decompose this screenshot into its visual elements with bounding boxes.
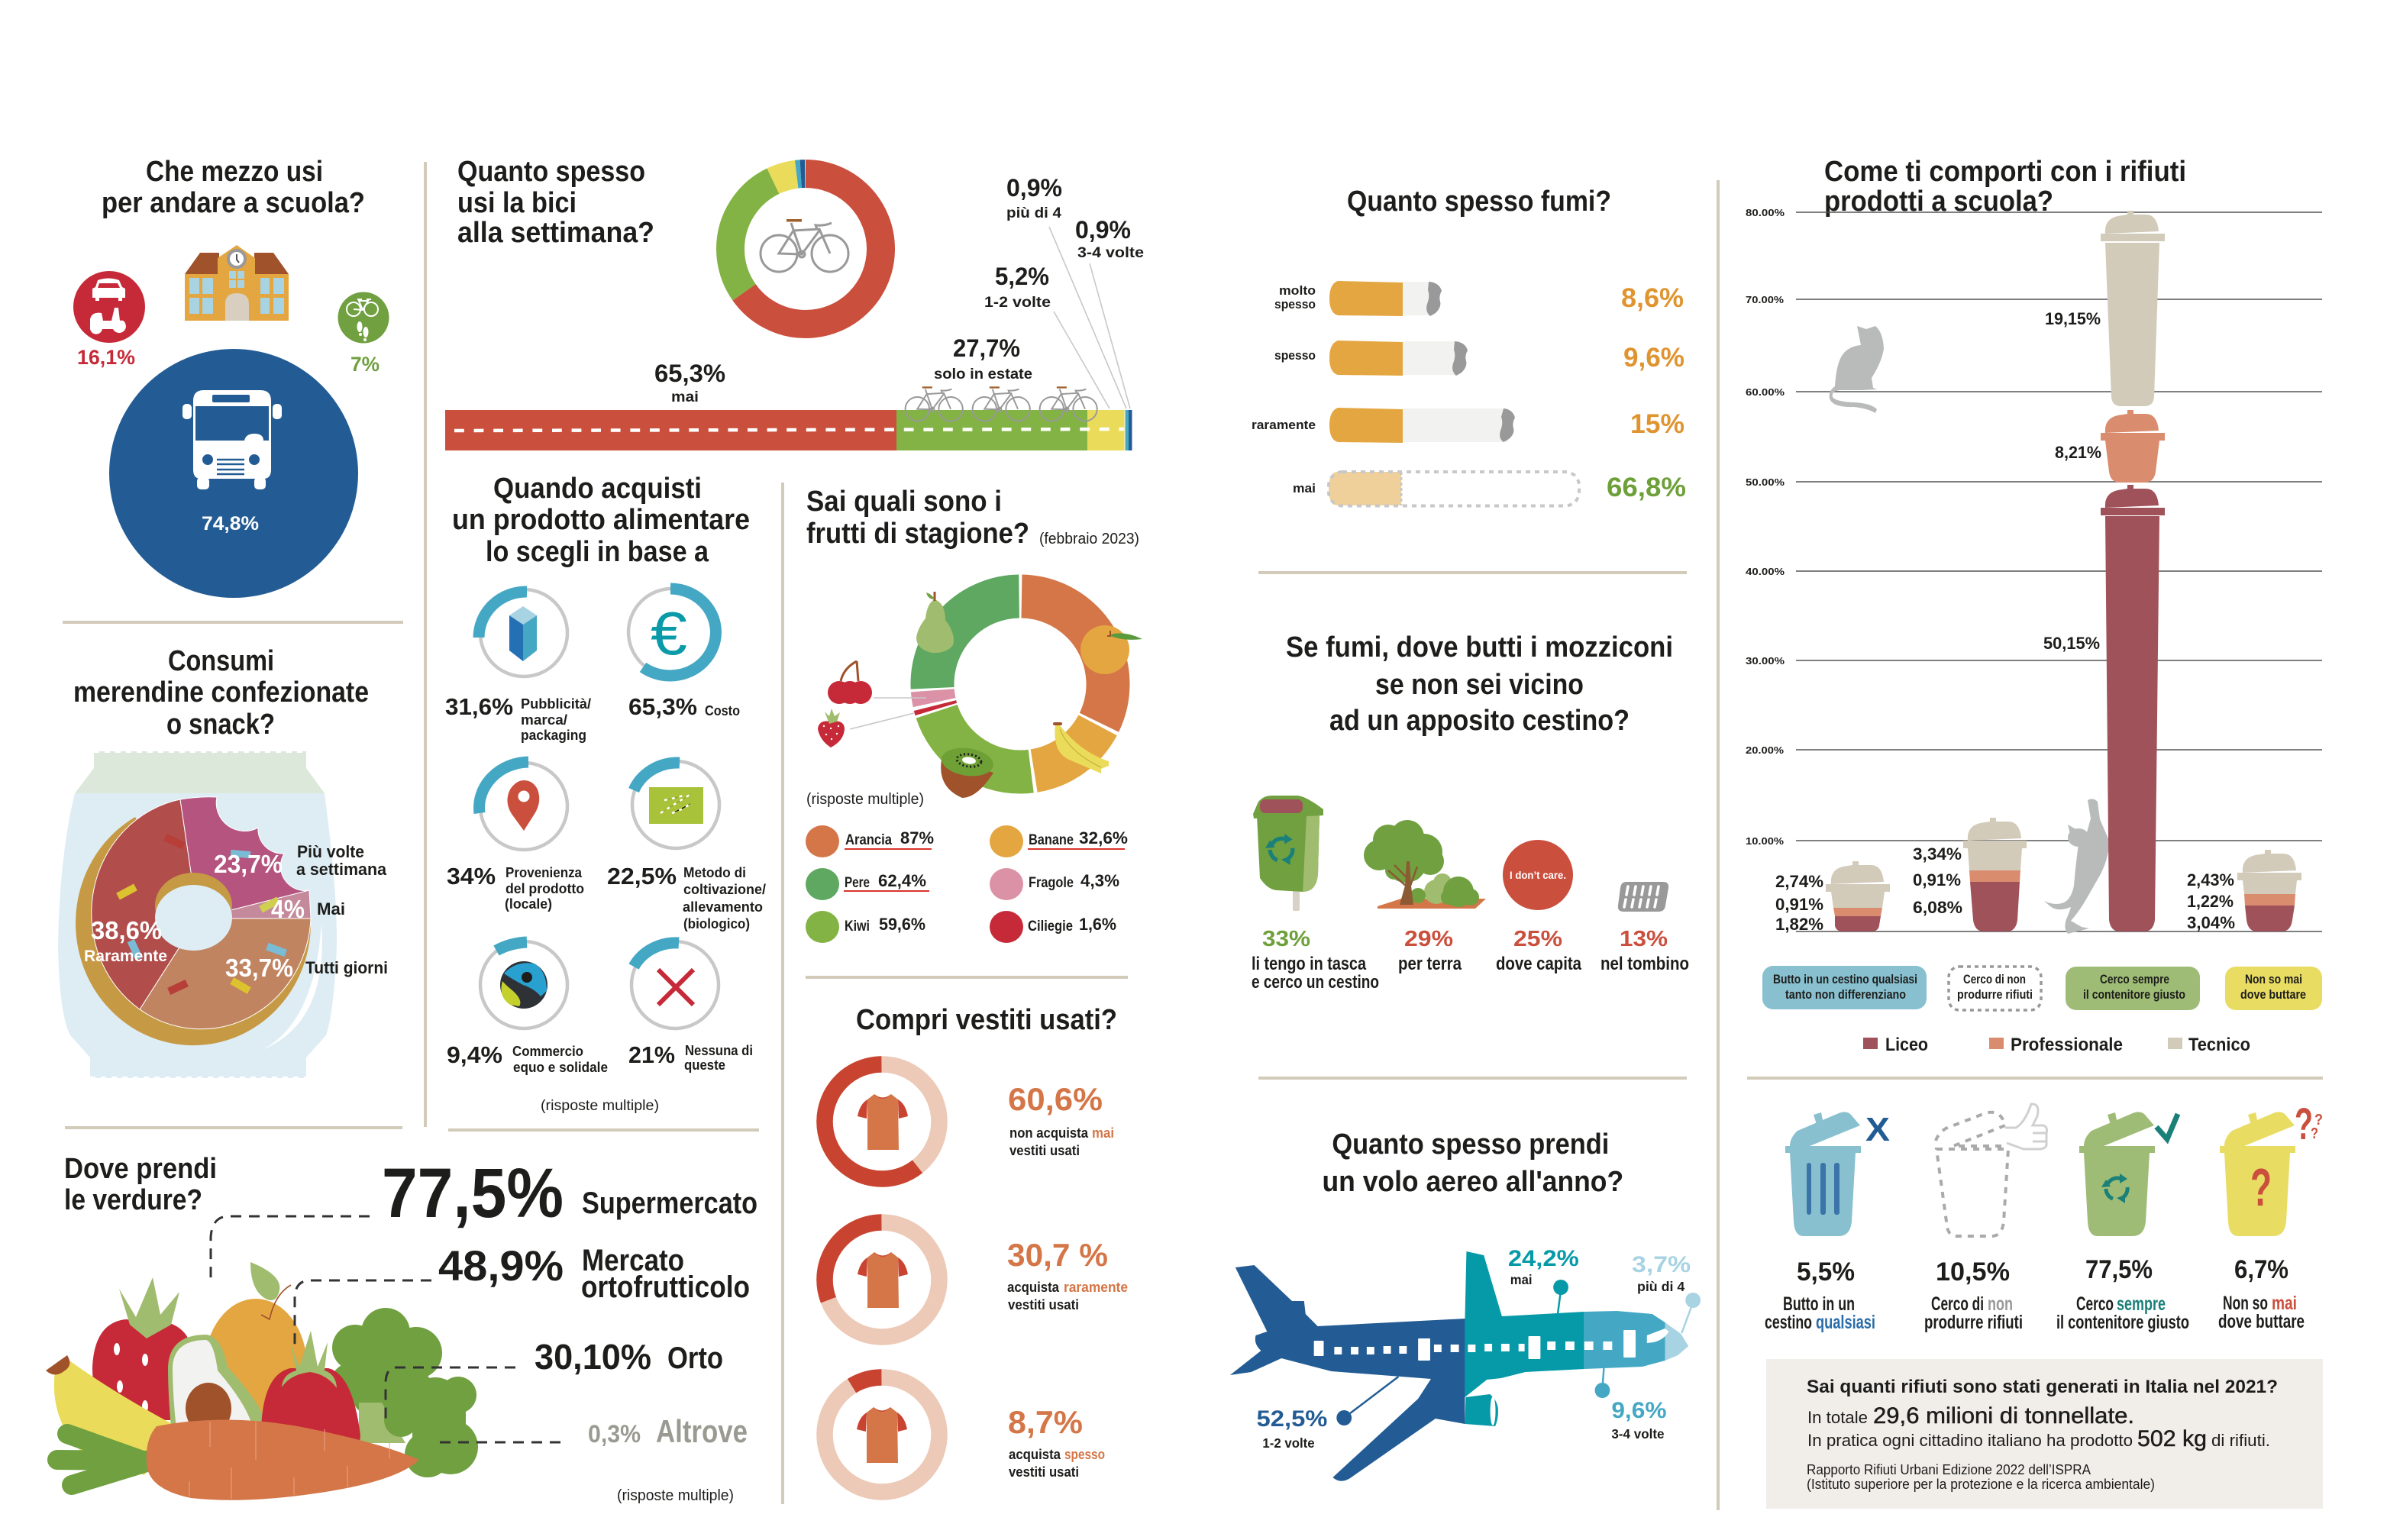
chart axis and grid: 60.00%: [1746, 386, 1785, 398]
callout: 24,2% mai: mai: [1510, 1272, 1532, 1287]
item: 60,6%: 60,6%: [1008, 1081, 1103, 1117]
panel: quando acquisti: [445, 473, 766, 1114]
heading: che mezzo usi: [102, 156, 365, 219]
callout: ispra data box: Rapporto Rifiuti Urbani Edizione 2022 dell’ISPRA: [1807, 1462, 2091, 1477]
item: butto in un cestino qualsiasi: 5,5%: [1797, 1258, 1855, 1287]
item: tree: per terra: [1398, 954, 1462, 974]
heading: che mezzo usi: Che mezzo usi: [146, 156, 323, 188]
chart axis and grid: 50.00%: [1746, 476, 1785, 488]
connector dashed lines: [211, 1216, 560, 1442]
labels: donut values: [84, 842, 388, 982]
item: pubblicità: 31,6%: [445, 693, 513, 720]
panel: frutti di stagione: [806, 486, 1142, 943]
item: i don't care: 25%: [1513, 927, 1562, 951]
heading: bici: Quanto spesso: [457, 156, 645, 188]
item: metodo biologico: (biologico): [683, 916, 750, 931]
item: bin: 33%: [1262, 927, 1310, 951]
row: raramente: 15%: [1630, 409, 1684, 439]
pill: cerco di non produrre: produrre rifiuti: [1957, 987, 2033, 1002]
panel: compri vestiti usati: [825, 1004, 1128, 1492]
labels: verdure values: 30,10%: [535, 1337, 651, 1377]
item: 60,6%: mai: [1092, 1125, 1114, 1141]
labels: donut values: Più volte: [297, 842, 364, 861]
item: tree: [1364, 820, 1486, 974]
item: 30,7%: vestiti usati: [1008, 1297, 1079, 1312]
chart axis and grid: 40.00%: [1746, 566, 1785, 577]
legend: frutti: [806, 825, 1128, 943]
row: mai: 66,8%: [1607, 473, 1686, 502]
labels: chart values: 6,08%: [1913, 898, 1962, 917]
legend: scuole: Tecnico: [2188, 1035, 2250, 1055]
heading: volo: Quanto spesso prendi: [1332, 1128, 1609, 1161]
item: nessuna di queste: Nessuna di: [685, 1043, 753, 1058]
item: cerco di non produrre rifiuti: produrre rifiuti: [1924, 1312, 2023, 1333]
labels: bici values: 5,2%: [995, 263, 1049, 290]
item: metodo biologico: allevamento: [683, 899, 763, 915]
item: commercio equo: Commercio: [512, 1044, 583, 1059]
labels: chart values: 2,43%: [2187, 870, 2234, 889]
legend: frutti: 87%: [900, 828, 934, 847]
chart: road bar: [445, 410, 1132, 450]
labels: bici values: 65,3%: [654, 360, 725, 387]
callout: 52,5% 1-2 volte: [1256, 1377, 1398, 1451]
item: costo: 65,3%: [628, 693, 697, 720]
row: spesso: [1274, 341, 1684, 376]
heading: frutti: (febbraio 2023): [1039, 531, 1139, 547]
item: non so mai dove buttare: ?: [2314, 1112, 2323, 1128]
pill: cerco sempre: Cerco sempre: [2100, 972, 2169, 986]
item: butto in un cestino qualsiasi: [1765, 1111, 1890, 1333]
callout: ispra data box: 29,6 milioni di tonnellate.: [1873, 1403, 2134, 1429]
row: spesso: 9,6%: [1623, 343, 1684, 373]
icon: sitting cat: [1830, 326, 1884, 413]
item: pubblicità: packaging: [521, 728, 586, 743]
panel: rifiuti a scuola: [1746, 156, 2322, 1055]
item: non so mai dove buttare: mai: [2272, 1293, 2297, 1314]
item: nessuna di queste: queste: [684, 1057, 725, 1073]
labels: verdure values: ortofrutticolo: [581, 1270, 750, 1304]
labels: donut values: Raramente: [84, 948, 167, 965]
item: tombino: 13%: [1620, 927, 1668, 951]
heading: mozziconi: se non sei vicino: [1375, 669, 1584, 701]
value: 74,8%: 74,8%: [202, 513, 259, 534]
callout: 52,5% 1-2 volte: 1-2 volte: [1262, 1435, 1315, 1451]
item: pubblicità: marca/: [521, 712, 567, 728]
labels: chart values: 2,74%: [1775, 872, 1823, 891]
pill: cerco sempre: il contenitore giusto: [2083, 987, 2185, 1002]
item: provenienza: Provenienza: [506, 865, 583, 880]
heading: mozziconi: Se fumi, dove butti i mozziconi: [1286, 631, 1673, 663]
callout: ispra data box: In pratica ogni cittadino italiano ha prodotto: [1807, 1431, 2133, 1450]
item: commercio equo: [447, 941, 608, 1075]
labels: donut values: 4%: [271, 895, 305, 923]
labels: chart values: 0,91%: [1775, 895, 1823, 914]
chart: donut pie: [76, 797, 311, 1045]
legend: frutti: 1,6%: [1079, 915, 1116, 934]
labels: bici values: 27,7%: [953, 334, 1020, 362]
value: 7%: 7%: [350, 353, 380, 376]
heading: volo: [1323, 1128, 1623, 1198]
row: molto spesso: spesso: [1274, 297, 1316, 312]
item: bin: [1252, 796, 1379, 993]
labels: chart values: 1,22%: [2187, 892, 2234, 911]
item: provenienza: [447, 762, 584, 912]
item: 8,7%: acquista: [1009, 1447, 1061, 1462]
callout: 52,5% 1-2 volte: 52,5%: [1256, 1406, 1327, 1432]
chart axis and grid: 80.00%: [1746, 207, 1785, 218]
legend: frutti: 32,6%: [1079, 828, 1128, 847]
icon: climbing cat: [2044, 799, 2110, 934]
item: 8,7%: 8,7%: [1008, 1404, 1083, 1440]
heading: mozziconi: [1286, 631, 1673, 737]
labels: chart values: 0,91%: [1913, 870, 1961, 889]
labels: chart values: 50,15%: [2043, 634, 2100, 653]
row: spesso: spesso: [1274, 348, 1316, 363]
chart axis and grid: 10.00%: [1746, 835, 1784, 847]
pill: cerco sempre: [2066, 967, 2200, 1010]
item: tombino: nel tombino: [1600, 954, 1689, 974]
illustration: airplane: [1230, 1251, 1688, 1481]
labels: bici values: 3-4 volte: [1077, 245, 1144, 261]
heading: verdure: Dove prendi: [64, 1153, 217, 1185]
row: raramente: raramente: [1252, 418, 1316, 432]
callout: ispra data box: Sai quanti rifiuti sono stati generati in Italia nel 2021?: [1807, 1377, 2278, 1397]
item: 30,7%: raramente: [1064, 1280, 1128, 1295]
item: costo: €: [651, 599, 687, 667]
panel: mezzo per andare a scuola: [73, 156, 389, 598]
heading: quando acquisti: un prodotto alimentare: [452, 504, 750, 536]
labels: verdure values: Altrove: [656, 1413, 748, 1449]
icon: strawberry: [818, 709, 845, 747]
item: cerco sempre il contenitore giusto: 77,5%: [2085, 1255, 2153, 1284]
heading: verdure: [64, 1153, 217, 1216]
pill: butto in un cestino: [1762, 966, 1927, 1009]
heading: bici: alla settimana?: [457, 217, 654, 249]
callout: 24,2% mai: [1508, 1246, 1579, 1313]
callout: 3,7% più di 4: più di 4: [1637, 1279, 1684, 1294]
legend: scuole: Professionale: [2011, 1035, 2123, 1055]
labels: bici values: solo in estate: [934, 366, 1032, 383]
item: commercio equo: 9,4%: [447, 1041, 502, 1068]
labels: donut values: 38,6%: [91, 916, 162, 944]
item: non so mai dove buttare: Non so: [2223, 1293, 2268, 1314]
labels: chart values: 8,21%: [2055, 443, 2101, 462]
labels: verdure values: 48,9%: [438, 1241, 564, 1290]
labels: bici values: 0,9%: [1075, 216, 1131, 244]
item: provenienza: (locale): [505, 896, 552, 912]
bar: cup butto in un cestino: [1826, 861, 1890, 931]
heading: fumi: Quanto spesso fumi?: [1347, 186, 1611, 218]
item: 30,7%: [825, 1222, 1128, 1337]
labels: donut values: 23,7%: [214, 850, 283, 878]
item: 30,7%: 30,7 %: [1007, 1237, 1108, 1273]
legend: frutti: 4,3%: [1080, 871, 1119, 890]
callout: ispra data box: (Istituto superiore per la protezione e la ricerca ambientale): [1807, 1477, 2155, 1492]
item: 60,6%: vestiti usati: [1009, 1143, 1080, 1158]
legend: frutti: 62,4%: [878, 871, 926, 890]
labels: verdure values: 77,5%: [382, 1154, 564, 1232]
heading: frutti: [806, 486, 1139, 550]
leader lines: [1049, 227, 1130, 408]
labels: chart values: 3,34%: [1913, 844, 1962, 864]
item: 8,7%: spesso: [1064, 1447, 1105, 1462]
panel: bidoni riepilogo: [1765, 1099, 2323, 1509]
icon: school building: [185, 245, 289, 321]
illustration: fruit and vegetables: [46, 1262, 478, 1500]
labels: verdure values: (risposte multiple): [617, 1487, 734, 1504]
item: non so mai dove buttare: 6,7%: [2234, 1255, 2288, 1284]
chart axis and grid: [1746, 207, 2322, 931]
item: non so mai dove buttare: dove buttare: [2218, 1311, 2305, 1332]
labels: verdure values: Supermercato: [582, 1186, 757, 1220]
item: cerco di non produrre rifiuti: [1924, 1104, 2046, 1333]
pill: non so mai: dove buttare: [2240, 987, 2306, 1002]
item: costo: [628, 589, 740, 720]
legend: frutti: Arancia: [845, 832, 892, 848]
labels: verdure values: Orto: [667, 1341, 723, 1375]
item: non so mai dove buttare: ?: [2295, 1099, 2313, 1149]
labels: chart values: 3,04%: [2187, 913, 2235, 932]
item: provenienza: del prodotto: [506, 881, 584, 896]
item: 60,6%: non acquista: [1009, 1125, 1089, 1141]
item: metodo biologico: Metodo di: [683, 865, 746, 880]
labels: verdure values: 0,3%: [588, 1420, 641, 1448]
item: costo: Costo: [705, 703, 740, 718]
icon: car and scooter: [73, 271, 145, 343]
item: cerco sempre il contenitore giusto: il contenitore giusto: [2056, 1312, 2189, 1333]
legend: frutti: Kiwi: [845, 919, 870, 935]
callout: ispra data box: [1766, 1359, 2323, 1509]
pill: butto in un cestino: tanto non differenziano: [1785, 987, 1906, 1002]
heading: volo: un volo aereo all'anno?: [1323, 1166, 1623, 1198]
panel: merendine: [58, 645, 388, 1078]
heading: verdure: le verdure?: [64, 1184, 202, 1216]
item: metodo biologico: [607, 761, 766, 931]
note: risposte multiple: (risposte multiple): [806, 791, 924, 808]
icon: bus: [182, 390, 282, 489]
labels: chart values: 19,15%: [2045, 309, 2101, 328]
item: metodo biologico: coltivazione/: [683, 882, 766, 897]
item: 60,6%: [825, 1064, 1114, 1179]
heading: frutti: Sai quali sono i: [806, 486, 1002, 518]
item: cerco di non produrre rifiuti: Cerco di: [1931, 1293, 1984, 1315]
callout: 9,6% 3-4 volte: 9,6%: [1611, 1398, 1667, 1423]
labels: chart values: [1775, 309, 2235, 934]
legend: frutti: Ciliegie: [1028, 919, 1073, 935]
heading: frutti: frutti di stagione?: [806, 518, 1029, 550]
legend: scuole: Liceo: [1885, 1035, 1928, 1055]
bar: cup cerco sempre il contenitore giusto: [2101, 211, 2165, 931]
legend: frutti: Pere: [845, 875, 870, 891]
icon: kiwi: [940, 744, 995, 798]
item: pubblicità: [445, 589, 591, 743]
labels: bici values: 0,9%: [1006, 174, 1062, 202]
heading: bici: [457, 156, 654, 249]
pill: non so mai: [2225, 967, 2322, 1010]
item: 30,7%: acquista: [1007, 1280, 1060, 1295]
item: butto in un cestino qualsiasi: X: [1865, 1111, 1890, 1148]
labels: bici values: [654, 174, 1144, 405]
heading: merendine: Consumi: [168, 645, 274, 677]
icon: banana: [1053, 722, 1109, 773]
heading: rifiuti: [1824, 156, 2186, 218]
chart axis and grid: 20.00%: [1746, 744, 1784, 756]
item: tombino: [1600, 882, 1689, 974]
item: cerco di non produrre rifiuti: 10,5%: [1936, 1258, 2010, 1287]
item: cerco sempre il contenitore giusto: [2056, 1112, 2189, 1333]
legend: frutti: Banane: [1029, 832, 1074, 848]
item: metodo biologico: 22,5%: [607, 863, 677, 889]
item: cerco sempre il contenitore giusto: Cerco: [2076, 1293, 2114, 1315]
heading: quando acquisti: [452, 473, 750, 568]
row: molto spesso: 8,6%: [1621, 283, 1684, 313]
panel: mozziconi: [1252, 631, 1689, 993]
labels: chart values: 1,82%: [1775, 915, 1823, 934]
icon: bicycle: [761, 219, 848, 272]
icon: cherries: [828, 661, 872, 704]
heading: merendine: merendine confezionate: [73, 676, 369, 709]
heading: merendine: o snack?: [166, 709, 275, 741]
labels: donut values: a settimana: [296, 860, 387, 879]
pill: non so mai: Non so mai: [2245, 972, 2302, 986]
labels: bici values: 1-2 volte: [984, 295, 1051, 311]
labels: verdure values: [382, 1154, 757, 1504]
callout: 3,7% più di 4: [1632, 1252, 1701, 1333]
item: non so mai dove buttare: ?: [2250, 1157, 2272, 1217]
panel: quanto spesso usi la bici: [445, 156, 1144, 450]
callout: 9,6% 3-4 volte: 3-4 volte: [1611, 1426, 1665, 1442]
item: 8,7%: [825, 1377, 1105, 1492]
panel: quanto spesso fumi: [1252, 186, 1686, 505]
item: butto in un cestino qualsiasi: Butto in un: [1783, 1293, 1855, 1315]
labels: donut values: 33,7%: [225, 954, 293, 982]
row: molto spesso: molto: [1279, 283, 1316, 298]
heading: rifiuti: Come ti comporti con i rifiuti: [1824, 156, 2186, 188]
heading: mozziconi: ad un apposito cestino?: [1329, 705, 1630, 737]
item: i don't care: dove capita: [1496, 954, 1582, 974]
legend: frutti: 59,6%: [879, 915, 925, 934]
pill: cerco di non produrre: Cerco di non: [1963, 972, 2026, 986]
bar: cup non so mai: [2237, 850, 2301, 931]
legend: scuole: [1863, 1035, 2250, 1055]
chart: frutti donut: [932, 596, 1108, 772]
chart axis and grid: 70.00%: [1746, 294, 1784, 305]
callout: 3,7% più di 4: 3,7%: [1632, 1252, 1691, 1277]
icon: pear: [916, 592, 954, 653]
icon: bicycle and footprints: [338, 292, 389, 344]
item: 8,7%: vestiti usati: [1009, 1464, 1079, 1480]
item: commercio equo: equo e solidale: [513, 1060, 608, 1075]
item: bin: li tengo in tasca: [1252, 954, 1367, 974]
item: non so mai dove buttare: [2218, 1099, 2323, 1332]
item: tree: 29%: [1404, 927, 1453, 951]
item: i don't care: [1496, 840, 1582, 974]
panel: dove prendi le verdure: [46, 1153, 757, 1504]
heading: rifiuti: prodotti a scuola?: [1824, 186, 2053, 218]
heading: bici: usi la bici: [457, 187, 577, 219]
note: risposte multiple: (risposte multiple): [541, 1098, 659, 1114]
icons: three bicycles: [906, 386, 1097, 421]
item: i don't care: I don’t care.: [1510, 869, 1566, 881]
icon: snack bag: [58, 751, 337, 1078]
labels: bici values: più di 4: [1006, 205, 1061, 221]
bar: cup cerco di non produrre: [1963, 818, 2027, 931]
labels: donut values: Mai: [317, 899, 345, 919]
chart: big bus circle: [109, 349, 358, 598]
callout: ispra data box: 502 kg: [2137, 1426, 2207, 1451]
heading: merendine: [73, 645, 369, 741]
row: raramente: [1252, 408, 1684, 443]
item: cerco di non produrre rifiuti: non: [1988, 1293, 2013, 1315]
item: butto in un cestino qualsiasi: cestino: [1765, 1312, 1812, 1333]
icon: orange: [1080, 625, 1142, 674]
pill: butto in un cestino: Butto in un cestino qualsiasi: [1773, 972, 1917, 986]
heading: quando acquisti: lo scegli in base a: [486, 536, 709, 568]
labels: bici values: mai: [671, 389, 699, 405]
legend: frutti: Fragole: [1029, 875, 1074, 891]
row: mai: [1293, 472, 1686, 505]
pill: cerco di non produrre: [1949, 967, 2041, 1010]
labels: verdure values: Mercato: [582, 1244, 684, 1277]
value: 16,1%: 16,1%: [77, 346, 135, 369]
item: butto in un cestino qualsiasi: qualsiasi: [1816, 1312, 1875, 1333]
panel: volo aereo: [1230, 1128, 1701, 1481]
item: bin: e cerco un cestino: [1252, 972, 1379, 993]
labels: donut values: Tutti giorni: [305, 958, 388, 977]
item: nessuna di queste: [628, 941, 753, 1073]
item: nessuna di queste: 21%: [628, 1041, 675, 1068]
callout: ispra data box: In totale: [1807, 1408, 1868, 1427]
heading: quando acquisti: Quando acquisti: [493, 473, 702, 505]
callout: ispra data box: di rifiuti.: [2211, 1431, 2270, 1450]
heading: vestiti: Compri vestiti usati?: [856, 1004, 1117, 1036]
row: mai: mai: [1293, 481, 1316, 496]
heading: che mezzo usi: per andare a scuola?: [102, 187, 365, 219]
callout: 9,6% 3-4 volte: [1595, 1368, 1667, 1442]
item: provenienza: 34%: [447, 863, 496, 889]
item: pubblicità: Pubblicità/: [521, 696, 591, 712]
callout: 24,2% mai: 24,2%: [1508, 1246, 1579, 1271]
leader lines: [850, 698, 926, 729]
row: molto spesso: [1274, 281, 1684, 316]
item: non so mai dove buttare: ?: [2311, 1125, 2318, 1142]
item: cerco sempre il contenitore giusto: sempre: [2117, 1293, 2166, 1315]
chart axis and grid: 30.00%: [1746, 655, 1785, 667]
chart: bici donut: [730, 174, 881, 324]
